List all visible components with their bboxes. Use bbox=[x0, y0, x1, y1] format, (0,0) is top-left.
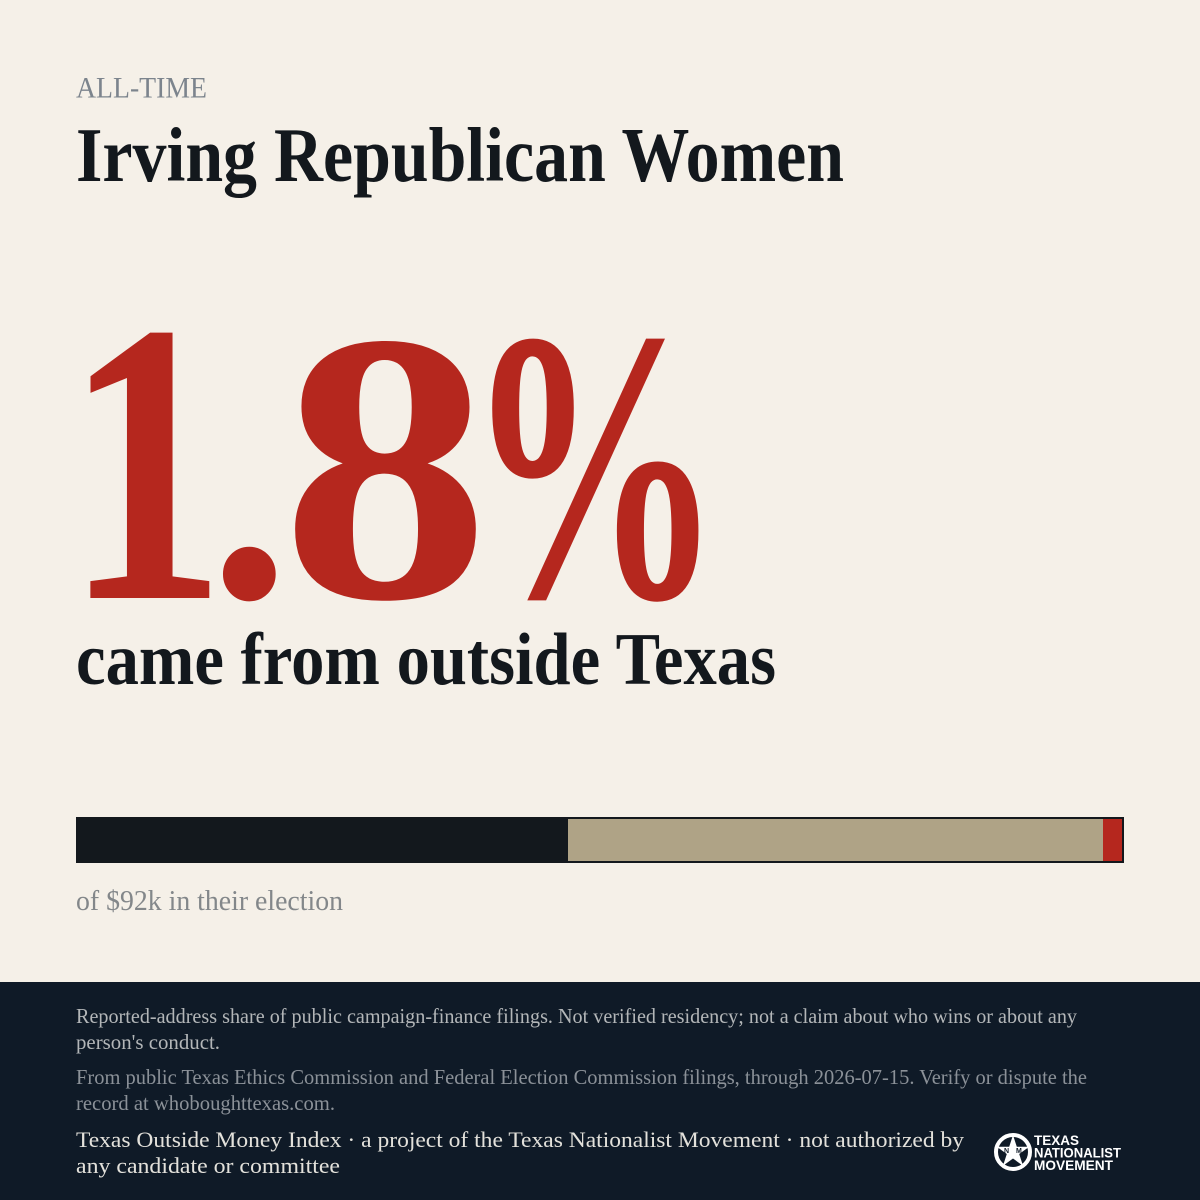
logo emblem: M bbox=[1016, 1148, 1022, 1155]
logo emblem: N bbox=[1004, 1148, 1009, 1155]
logo wordmark: MOVEMENT bbox=[1034, 1158, 1114, 1173]
logo wordmark: TEXAS bbox=[1034, 1133, 1079, 1148]
logo wordmark bbox=[1034, 1133, 1122, 1173]
eyebrow: all-time: ALL-TIME bbox=[76, 72, 207, 104]
big percentage: 1.8%: % bbox=[466, 252, 722, 682]
attribution text: any candidate or committee bbox=[76, 1153, 340, 1178]
stacked bar bbox=[77, 818, 1123, 862]
footer panel bbox=[0, 982, 1200, 1200]
bar caption: of $92k in their election bbox=[76, 886, 343, 917]
subheading: came from outside Texas bbox=[76, 619, 776, 701]
disclaimer text: Reported-address share of public campaign-finance filings. Not verified residency; not a claim about who wins or about any bbox=[76, 1004, 1077, 1028]
big percentage: 1.8% bbox=[64, 240, 722, 685]
disclaimer text: person's conduct. bbox=[76, 1030, 220, 1054]
logo emblem bbox=[996, 1135, 1030, 1169]
bar segment: outside Texas bbox=[1103, 819, 1122, 861]
big percentage: 1.8%: . bbox=[209, 296, 290, 670]
big percentage: 1.8%: 8 bbox=[281, 254, 490, 680]
source text: From public Texas Ethics Commission and Federal Election Commission filings, through 2026-07-15. Verify or dispute the bbox=[76, 1065, 1087, 1089]
big percentage: 1.8%: 1 bbox=[64, 240, 226, 685]
logo wordmark: NATIONALIST bbox=[1034, 1146, 1122, 1160]
logo: Texas Nationalist Movement bbox=[996, 1133, 1122, 1173]
bar segment: tan bbox=[568, 819, 1103, 861]
source text: record at whoboughttexas.com. bbox=[76, 1091, 335, 1115]
attribution text: Texas Outside Money Index · a project of the Texas Nationalist Movement · not authorized by bbox=[76, 1127, 964, 1152]
title: Irving Republican Women bbox=[76, 112, 844, 198]
